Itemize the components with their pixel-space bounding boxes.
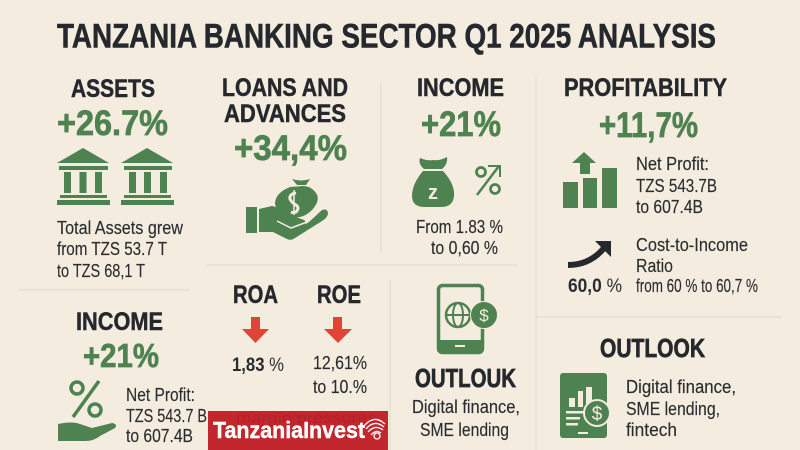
panel: outlook right	[560, 333, 736, 440]
icon: rising bar chart	[563, 152, 617, 208]
text: cost-to-income detail: Cost-to-Income	[636, 235, 748, 255]
icon: money bag	[412, 157, 454, 207]
text: cost-to-income detail: from 60 % to 60,7 %	[636, 276, 758, 296]
heading: outlook: OUTLOOK	[600, 333, 705, 363]
icon: hand holding money bag	[246, 179, 328, 240]
text: net profit detail	[636, 154, 717, 217]
panel: loans and advances	[222, 74, 348, 240]
icon: tablet with chart and dollar	[560, 373, 610, 438]
text: income detail: to 0,60 %	[431, 238, 498, 258]
icon: phone with globe and dollar: $	[479, 306, 489, 325]
heading: loans and advances: LOANS AND	[222, 74, 348, 102]
text: assets detail: from TZS 53.7 T	[57, 239, 167, 259]
text: outlook detail	[626, 377, 736, 440]
panel: profitability	[563, 74, 758, 297]
icon: bank buildings	[57, 148, 174, 205]
text: outlook detail: Digital finance,	[626, 377, 736, 397]
icon: percent with arrow	[476, 166, 500, 195]
heading: roe: ROE	[317, 281, 361, 309]
text: assets detail: Total Assets grew	[57, 218, 184, 238]
text: cost-to-income detail: Ratio	[636, 256, 673, 276]
text: assets detail	[57, 218, 184, 281]
icon: curved upward arrow	[568, 241, 611, 265]
icon: phone with globe and dollar	[437, 286, 498, 353]
text: outlook detail: SME lending,	[626, 399, 720, 419]
panel: income bottom	[58, 308, 207, 446]
text: outlook detail: fintech	[626, 420, 677, 440]
panel: income top	[412, 74, 504, 258]
text: roe values: to 10.%	[313, 377, 367, 397]
heading: outlouk: OUTLOUK	[415, 363, 516, 393]
heading: profitability: PROFITABILITY	[564, 74, 727, 102]
icon: roa down arrow	[242, 317, 269, 343]
text: roe values	[313, 353, 367, 397]
text: net profit detail: Net Profit:	[636, 154, 709, 174]
icon: percent over hand	[58, 381, 116, 441]
stat: income growth: +21%	[421, 105, 501, 144]
icon: money bag: z	[428, 182, 438, 204]
logo banner: TanzaniaInvest: margin pressures	[236, 410, 377, 427]
text: net profit detail: to 607.4B	[636, 197, 703, 217]
icon: roe down arrow	[324, 317, 352, 343]
text: income detail: From 1.83 %	[416, 217, 503, 237]
heading: loans and advances: ADVANCES	[224, 100, 346, 128]
stat: income growth: +21%	[83, 337, 159, 374]
text: outlook detail: Digital finance,	[412, 397, 520, 417]
text: outlook detail	[412, 397, 520, 440]
stat: cost-to-income value: 60,0 %	[568, 276, 622, 297]
icon: signal logo	[364, 419, 385, 439]
icon: tablet with chart and dollar: $	[592, 404, 603, 425]
heading: roa: ROA	[233, 281, 278, 309]
heading: income: INCOME	[417, 74, 504, 102]
text: assets detail: to TZS 68,1 T	[57, 261, 145, 281]
panel: outlook center	[412, 286, 520, 440]
heading: assets: ASSETS	[71, 75, 155, 103]
stat: profitability growth: +11,7%	[599, 106, 698, 145]
text: cost-to-income detail	[636, 235, 758, 296]
text: net profit detail: to 607.4B	[126, 426, 193, 446]
heading: income: INCOME	[76, 308, 163, 336]
text: roa value: 1,83 %	[232, 355, 284, 376]
stat: loans growth: +34,4%	[234, 129, 347, 168]
text: income detail	[416, 217, 503, 258]
panel: assets	[57, 75, 184, 281]
text: roe values: 12,61%	[313, 353, 367, 373]
text: outlook detail: SME lending	[420, 420, 509, 440]
text: net profit detail	[126, 385, 207, 446]
logo banner: TanzaniaInvest: TanzaniaInvest	[213, 417, 365, 443]
text: net profit detail: TZS 543.7B	[636, 176, 717, 196]
logo banner: TanzaniaInvest	[208, 410, 388, 450]
text: net profit detail: TZS 543.7 B	[126, 406, 207, 426]
stat: assets growth: +26.7%	[57, 104, 168, 143]
heading: loans and advances	[222, 74, 348, 128]
text: net profit detail: Net Profit:	[126, 385, 195, 405]
panel: roa and roe	[232, 281, 367, 397]
